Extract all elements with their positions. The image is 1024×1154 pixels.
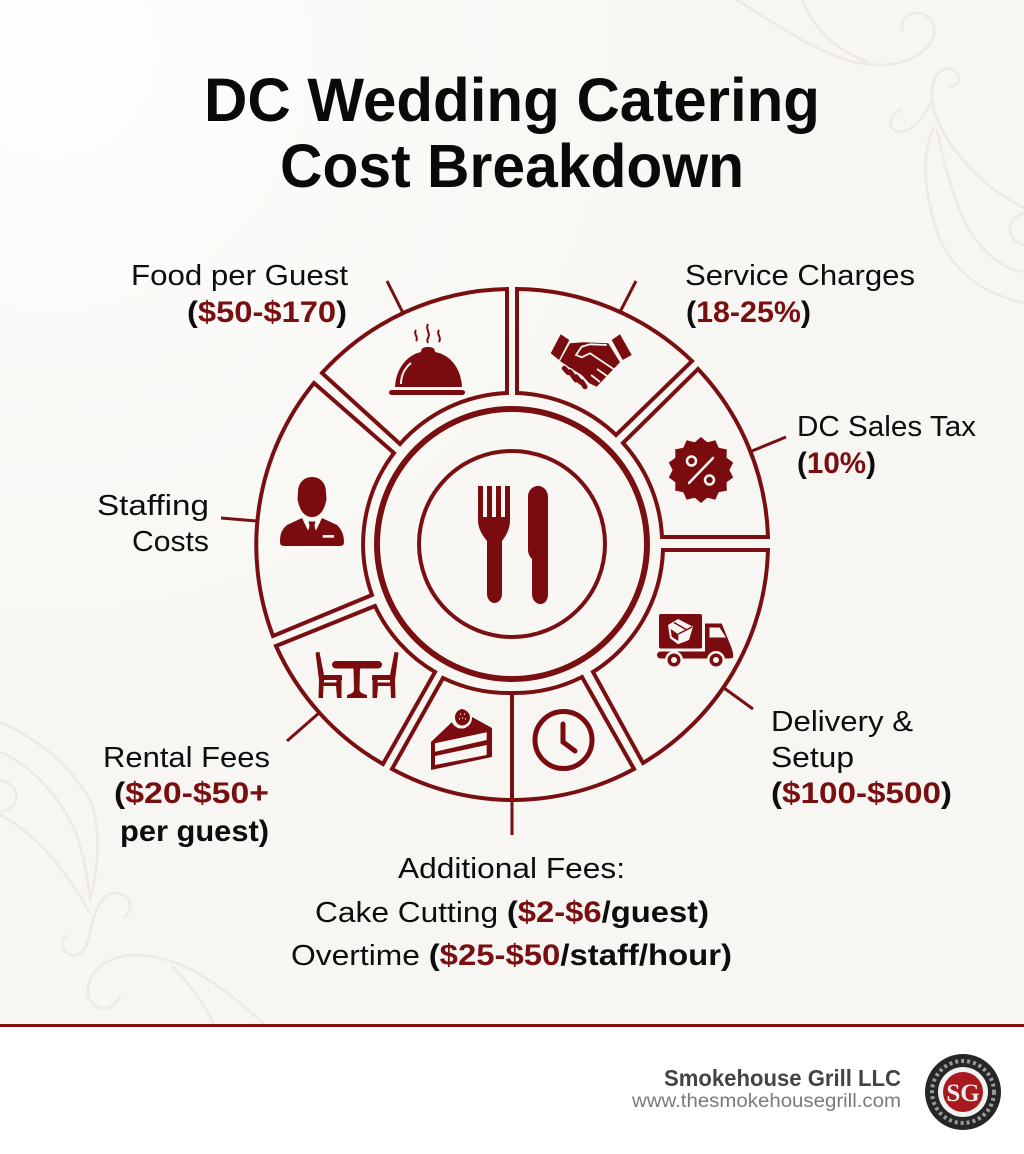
segment: food per guest (322, 289, 507, 444)
segment: rental fees (276, 606, 435, 764)
title: Cost Breakdown (280, 132, 744, 200)
icon: staff person (280, 477, 344, 546)
title (204, 66, 820, 200)
wheel diagram (256, 289, 768, 800)
label: DC sales tax (797, 411, 977, 480)
segment: overtime fee (512, 677, 634, 800)
outer plate ring (377, 409, 647, 679)
label: staffing costs: Costs (132, 526, 209, 558)
label: food per guest: Food per Guest (131, 260, 348, 292)
leader line: food (387, 281, 403, 313)
leader line: rental (287, 713, 319, 741)
icon: food cloche (389, 324, 465, 395)
footer company text: Smokehouse Grill LLC (664, 1065, 901, 1091)
icon: percent badge (667, 437, 735, 503)
segment: service charges (517, 289, 692, 435)
footer company text: www.thesmokehousegrill.com (631, 1091, 901, 1112)
label: DC sales tax: DC Sales Tax (797, 411, 977, 443)
label: delivery and setup: Delivery & (771, 706, 913, 738)
icon: clock (535, 712, 592, 768)
label: staffing costs (97, 490, 209, 558)
label: service charges: (18-25%) (686, 296, 811, 329)
leader line: tax (752, 437, 786, 451)
label: rental fees: ($20-$50+ (114, 777, 269, 810)
leader line: delivery (724, 688, 753, 709)
label: staffing costs: Staffing (97, 490, 209, 522)
icon: fork and knife (478, 486, 548, 604)
label: food per guest (131, 260, 348, 329)
label: food per guest: ($50-$170 ) (187, 296, 347, 329)
label: delivery and setup (771, 706, 952, 810)
label: additional fees (291, 853, 732, 972)
leader line: additional fees (510, 798, 514, 835)
label: rental fees: per guest) (120, 815, 269, 848)
company logo: SG (946, 1080, 980, 1107)
label: additional fees: Overtime ($25-$50 /staff/hour) (291, 939, 732, 972)
footer band (0, 1024, 1024, 1154)
segment: delivery and setup (593, 550, 768, 763)
label: DC sales tax: (10%) (797, 447, 876, 480)
inner plate ring (419, 451, 605, 637)
company logo (925, 1054, 1001, 1130)
label: additional fees: Cake Cutting ($2-$6/guest) (315, 896, 709, 929)
segment: DC sales tax (623, 369, 768, 537)
icon: delivery truck (657, 614, 733, 669)
footer company text (631, 1065, 901, 1112)
label: rental fees: Rental Fees (103, 742, 270, 774)
icon: handshake (551, 334, 632, 387)
label: delivery and setup: Setup (771, 742, 854, 774)
label: service charges (685, 260, 915, 329)
label: rental fees (103, 742, 270, 848)
icon: table and chairs (316, 652, 398, 698)
segment: cake cutting fee (392, 678, 512, 800)
label: service charges: Service Charges (685, 260, 915, 292)
label: delivery and setup: ($100-$500 ) (771, 777, 952, 810)
leader line: service (620, 281, 636, 312)
label: additional fees: Additional Fees: (398, 853, 625, 885)
leader line: staffing (221, 518, 257, 521)
icon: cake slice (431, 708, 492, 770)
title: DC Wedding Catering (204, 66, 820, 134)
segment: staffing costs (256, 383, 394, 636)
